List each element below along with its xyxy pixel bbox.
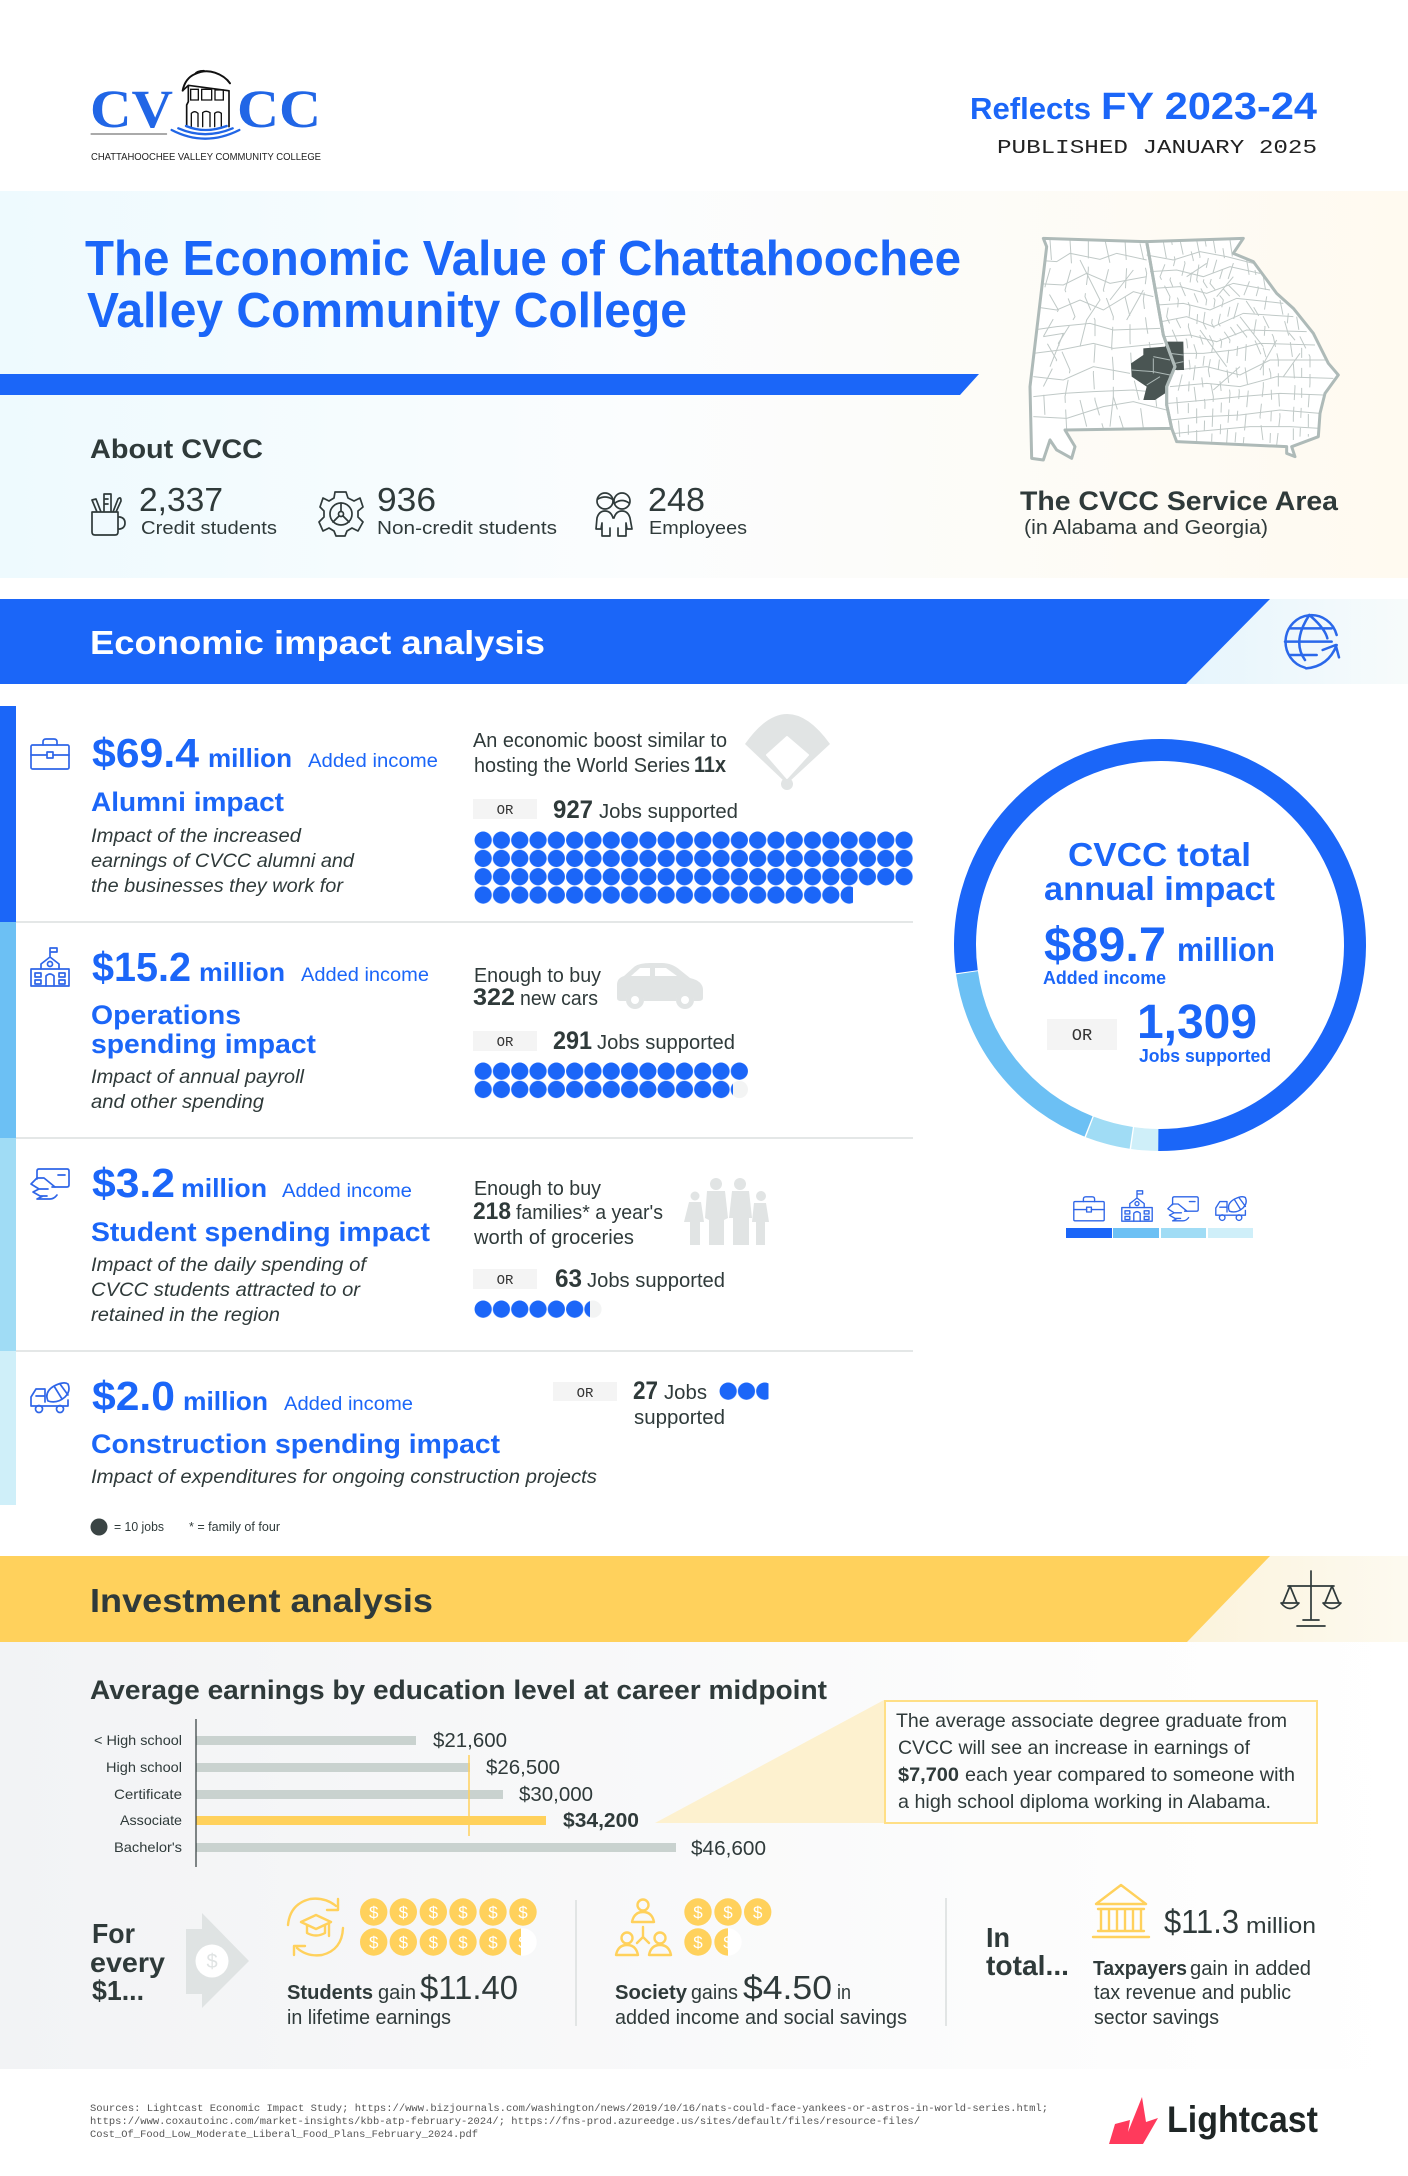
total jobs: 1,309 — [1137, 996, 1257, 1049]
stat: non-credit students — [319, 481, 557, 538]
total jobs — [1137, 996, 1271, 1066]
logo letters CV: CV — [90, 79, 173, 139]
panel: economic impact heading band — [0, 599, 1408, 684]
chart: earnings by education — [94, 1719, 766, 1867]
icon: school — [31, 948, 69, 986]
text: for every $1: $1... — [92, 1975, 144, 2006]
callout: associate degree earnings — [655, 1700, 1317, 1823]
amount: million — [199, 957, 285, 987]
comparison — [473, 965, 601, 1011]
text: in total: total... — [986, 1950, 1069, 1981]
taxpayers text: gain in added — [1190, 1958, 1311, 1980]
fiscal year label: Reflects — [970, 91, 1091, 126]
comparison: 218 — [473, 1198, 511, 1225]
icon: arrow with dollar — [186, 1913, 249, 2008]
description — [91, 1067, 305, 1113]
panel: operations spending impact — [31, 944, 748, 1113]
icon: baseball diamond — [745, 714, 830, 790]
amount: $2.0 — [92, 1373, 175, 1419]
amount: $15.2 — [92, 944, 191, 990]
society text: added income and social savings — [615, 2007, 907, 2029]
donut title: CVCC total — [1068, 836, 1251, 873]
stat: credit students: 2,337 — [139, 481, 223, 518]
axis labels: High school — [106, 1759, 182, 1775]
icon: mug with pencils — [92, 494, 125, 535]
coins: 4.50: $ — [693, 1933, 703, 1952]
description: Impact of the increased — [91, 826, 303, 847]
fiscal year label: FY 2023-24 — [1101, 86, 1317, 128]
icon: briefcase — [31, 739, 69, 769]
description: the businesses they work for — [91, 876, 344, 897]
jobs: supported — [634, 1407, 725, 1429]
or badge — [473, 1031, 537, 1051]
axis labels: < High school — [94, 1732, 182, 1748]
comparison: new cars — [520, 988, 598, 1010]
value labels: $34,200 — [563, 1810, 639, 1832]
donut title: annual impact — [1044, 870, 1275, 907]
fiscal year label — [970, 86, 1317, 128]
service area counties — [1131, 342, 1184, 400]
or badge: OR — [497, 803, 514, 819]
logo name: CHATTAHOOCHEE VALLEY COMMUNITY COLLEGE — [91, 151, 321, 163]
text: for every $1: For — [92, 1918, 135, 1949]
society text: Society — [615, 1982, 688, 2004]
amount: million — [181, 1173, 267, 1203]
total income: million — [1177, 931, 1275, 968]
map: service area — [1030, 238, 1338, 460]
heading: investment analysis: Investment analysis — [90, 1582, 433, 1619]
map caption: (in Alabama and Georgia) — [1024, 517, 1268, 539]
amount — [92, 1373, 413, 1419]
description — [91, 826, 355, 897]
jobs: 291 — [553, 1027, 592, 1055]
axis labels: Bachelor's — [114, 1839, 182, 1855]
panel: society gains — [615, 1898, 907, 2029]
header logo: CVCC — [90, 71, 321, 163]
or badge: OR — [1072, 1027, 1092, 1046]
jobs: 27 — [633, 1377, 658, 1405]
or badge: OR — [497, 1035, 514, 1051]
amount: Added income — [301, 964, 429, 986]
description: earnings of CVCC alumni and — [91, 851, 355, 872]
logo: Lightcast — [1109, 2097, 1318, 2144]
legend: dots and family note: = 10 jobs — [114, 1519, 164, 1534]
title — [85, 232, 961, 338]
taxpayers text: sector savings — [1094, 2007, 1219, 2029]
coins: 11.40: $ — [369, 1933, 379, 1952]
stat: employees — [596, 481, 747, 538]
name: Operations — [91, 1000, 241, 1030]
map caption: The CVCC Service Area — [1020, 486, 1339, 516]
panel: investment background — [0, 1642, 1408, 2069]
sources: Cost_Of_Food_Low_Moderate_Liberal_Food_Plans_February_2024.pdf — [90, 2129, 478, 2141]
legend: dots and family note — [90, 1518, 281, 1536]
description: Impact of annual payroll — [91, 1067, 305, 1088]
amount: Added income — [308, 750, 438, 772]
or badge — [553, 1382, 617, 1402]
sources: https://www.coxautoinc.com/market-insights/kbb-atp-february-2024/; https://fns-prod.azureedge.us/sites/default/files/resource-files/ — [90, 2116, 920, 2128]
stat: non-credit students: Non-credit students — [377, 517, 557, 538]
dots: 927 jobs — [474, 831, 913, 904]
students text — [287, 1969, 518, 2029]
panel: taxpayers gain — [1093, 1885, 1316, 2029]
coins: 4.50: $ — [753, 1903, 763, 1922]
or badge — [1047, 1019, 1117, 1050]
icon: family — [684, 1178, 769, 1245]
stat: employees: 248 — [648, 481, 705, 518]
description: retained in the region — [91, 1305, 280, 1326]
society text: gains — [691, 1982, 738, 2004]
comparison: worth of groceries — [473, 1227, 634, 1249]
text: for every $1: every — [90, 1947, 165, 1978]
jobs — [633, 1377, 725, 1429]
panel: investment analysis heading band — [0, 1556, 1408, 1642]
value labels: $26,500 — [486, 1757, 560, 1779]
description: Impact of the daily spending of — [91, 1255, 368, 1276]
heading: average earnings: Average earnings by education level at career midpoint — [90, 1675, 827, 1705]
coins: 11.40: $ — [429, 1933, 439, 1952]
amount: $3.2 — [92, 1160, 175, 1206]
taxpayers text: tax revenue and public — [1094, 1982, 1291, 2004]
coins: 4.50: $ — [723, 1903, 733, 1922]
panel: students gain — [287, 1898, 537, 2029]
logo building — [91, 71, 239, 139]
callout: associate degree earnings: a high school diploma working in Alabama. — [898, 1791, 1271, 1813]
panel: construction spending impact — [31, 1373, 768, 1488]
amount — [92, 730, 438, 776]
sources — [90, 2103, 1048, 2141]
jobs: Jobs supported — [587, 1270, 725, 1292]
society text: in — [837, 1982, 851, 2004]
comparison: families* a year's — [516, 1202, 663, 1224]
dots: 291 jobs — [474, 1062, 748, 1099]
heading: about: About CVCC — [90, 434, 263, 464]
stat: non-credit students: 936 — [377, 481, 436, 518]
logo: Lightcast: Lightcast — [1167, 2099, 1318, 2140]
students text: $11.40 — [420, 1969, 518, 2006]
stat: employees: Employees — [649, 517, 747, 538]
icon: society network — [616, 1900, 671, 1955]
icon: card in hand — [31, 1169, 69, 1199]
stat: credit students — [92, 481, 277, 538]
comparison: An economic boost similar to — [473, 730, 727, 752]
amount: $11.3 — [1164, 1903, 1239, 1940]
icon: graduation cycle — [288, 1899, 343, 1955]
jobs: Jobs — [664, 1382, 707, 1404]
icon: people — [596, 493, 632, 536]
name: Student spending impact — [91, 1217, 430, 1247]
chart: total annual impact donut — [963, 748, 1357, 1142]
amount: million — [183, 1386, 268, 1416]
callout: associate degree earnings: The average associate degree graduate from — [896, 1710, 1287, 1732]
name — [91, 1000, 316, 1059]
dots: 63 jobs — [474, 1300, 602, 1318]
description: Impact of expenditures for ongoing construction projects — [91, 1467, 598, 1488]
text: in total: In — [986, 1922, 1010, 1953]
coins: 4.50: $ — [723, 1933, 733, 1952]
comparison: Enough to buy — [474, 1178, 601, 1200]
callout: associate degree earnings: $7,700 — [898, 1764, 959, 1786]
comparison: 322 — [473, 984, 515, 1011]
value labels: $30,000 — [519, 1784, 593, 1806]
name: spending impact — [91, 1029, 316, 1059]
name: Construction spending impact — [91, 1429, 500, 1459]
society text — [615, 1969, 907, 2029]
coins: 11.40: $ — [488, 1933, 498, 1952]
publication date: PUBLISHED JANUARY 2025 — [997, 137, 1317, 159]
or badge: OR — [497, 1273, 514, 1289]
coins: 11.40: $ — [458, 1933, 468, 1952]
coins: 11.40: $ — [458, 1903, 468, 1922]
description: CVCC students attracted to or — [91, 1280, 361, 1301]
icon: globe — [1285, 615, 1339, 668]
taxpayers text: Taxpayers — [1093, 1958, 1187, 1980]
coins: 4.50: $ — [693, 1903, 703, 1922]
map caption — [1020, 486, 1339, 539]
callout: associate degree earnings: each year compared to someone with — [965, 1764, 1295, 1786]
jobs: Jobs supported — [599, 801, 738, 823]
value labels — [433, 1730, 766, 1860]
comparison: Enough to buy — [474, 965, 601, 987]
axis labels: Associate — [120, 1812, 182, 1828]
amount: $69.4 — [92, 730, 199, 776]
legend: dots and family note: * = family of four — [189, 1519, 281, 1534]
amount: million — [1246, 1913, 1316, 1938]
dots: 27 jobs — [719, 1382, 768, 1400]
logo letters CC: CC — [237, 79, 321, 139]
or badge — [473, 1269, 537, 1289]
society text: $4.50 — [743, 1969, 832, 2006]
total income: Added income — [1043, 968, 1166, 988]
amount: Added income — [282, 1180, 412, 1202]
icon: government building — [1093, 1885, 1149, 1937]
comparison — [473, 1178, 663, 1249]
description: and other spending — [91, 1092, 264, 1113]
students text: in lifetime earnings — [287, 2007, 451, 2029]
students text: Students — [287, 1982, 373, 2004]
legend: impact categories — [1066, 1191, 1253, 1238]
icon: scales — [1281, 1571, 1341, 1626]
donut title — [1044, 836, 1275, 907]
coins: 11.40: $ — [399, 1903, 409, 1922]
heading: economic impact analysis: Economic impact analysis — [90, 624, 545, 661]
amount — [92, 944, 429, 990]
jobs: 63 — [555, 1265, 582, 1293]
sources: Sources: Lightcast Economic Impact Study; https://www.bizjournals.com/washington/news/2019/10/16/nats-could-face-yankees-or-astros-in-world-series.html; — [90, 2103, 1048, 2115]
coins: 11.40 — [360, 1898, 537, 1956]
axis labels: Certificate — [114, 1786, 182, 1802]
stat: credit students: Credit students — [141, 517, 277, 538]
name: Alumni impact — [91, 787, 284, 817]
total income: $89.7 — [1044, 919, 1166, 972]
icon: gear — [319, 492, 363, 536]
comparison — [473, 730, 727, 777]
panel: student spending impact — [31, 1160, 769, 1326]
icon: arrow with dollar: $ — [206, 1951, 218, 1973]
jobs — [553, 796, 738, 824]
jobs — [553, 1027, 735, 1055]
or badge: OR — [577, 1386, 594, 1402]
axis labels — [94, 1732, 182, 1855]
side bars — [0, 706, 16, 1505]
icon: cement truck — [31, 1383, 69, 1412]
total income — [1043, 919, 1275, 988]
or badge — [473, 799, 537, 819]
coins: 4.50 — [684, 1898, 771, 1956]
coins: 11.40: $ — [399, 1933, 409, 1952]
coins: 11.40: $ — [429, 1903, 439, 1922]
coins: 11.40: $ — [518, 1933, 528, 1952]
panel: hero background — [0, 191, 1408, 578]
students text: gain — [378, 1982, 416, 2004]
callout: associate degree earnings: CVCC will see an increase in earnings of — [898, 1737, 1251, 1759]
title: Valley Community College — [87, 284, 687, 338]
coins: 11.40: $ — [369, 1903, 379, 1922]
amount — [92, 1160, 412, 1206]
value labels: $46,600 — [691, 1838, 766, 1860]
coins: 11.40: $ — [518, 1903, 528, 1922]
taxpayers text — [1093, 1958, 1311, 2029]
coins: 11.40: $ — [488, 1903, 498, 1922]
value labels: $21,600 — [433, 1730, 507, 1752]
panel: alumni impact — [31, 714, 913, 904]
jobs — [555, 1265, 725, 1293]
jobs: 927 — [553, 796, 593, 824]
jobs: Jobs supported — [597, 1032, 735, 1054]
text: for every $1 — [90, 1918, 165, 2006]
amount: million — [208, 743, 292, 773]
text: in total — [986, 1922, 1069, 1981]
title rule — [0, 374, 979, 395]
comparison: 11x — [694, 752, 727, 777]
title: The Economic Value of Chattahoochee — [85, 232, 961, 286]
description — [91, 1255, 368, 1326]
comparison: hosting the World Series — [474, 755, 690, 777]
amount: Added income — [284, 1393, 413, 1415]
amount — [1164, 1903, 1316, 1940]
total jobs: Jobs supported — [1139, 1046, 1271, 1066]
icon: car — [617, 963, 703, 1009]
